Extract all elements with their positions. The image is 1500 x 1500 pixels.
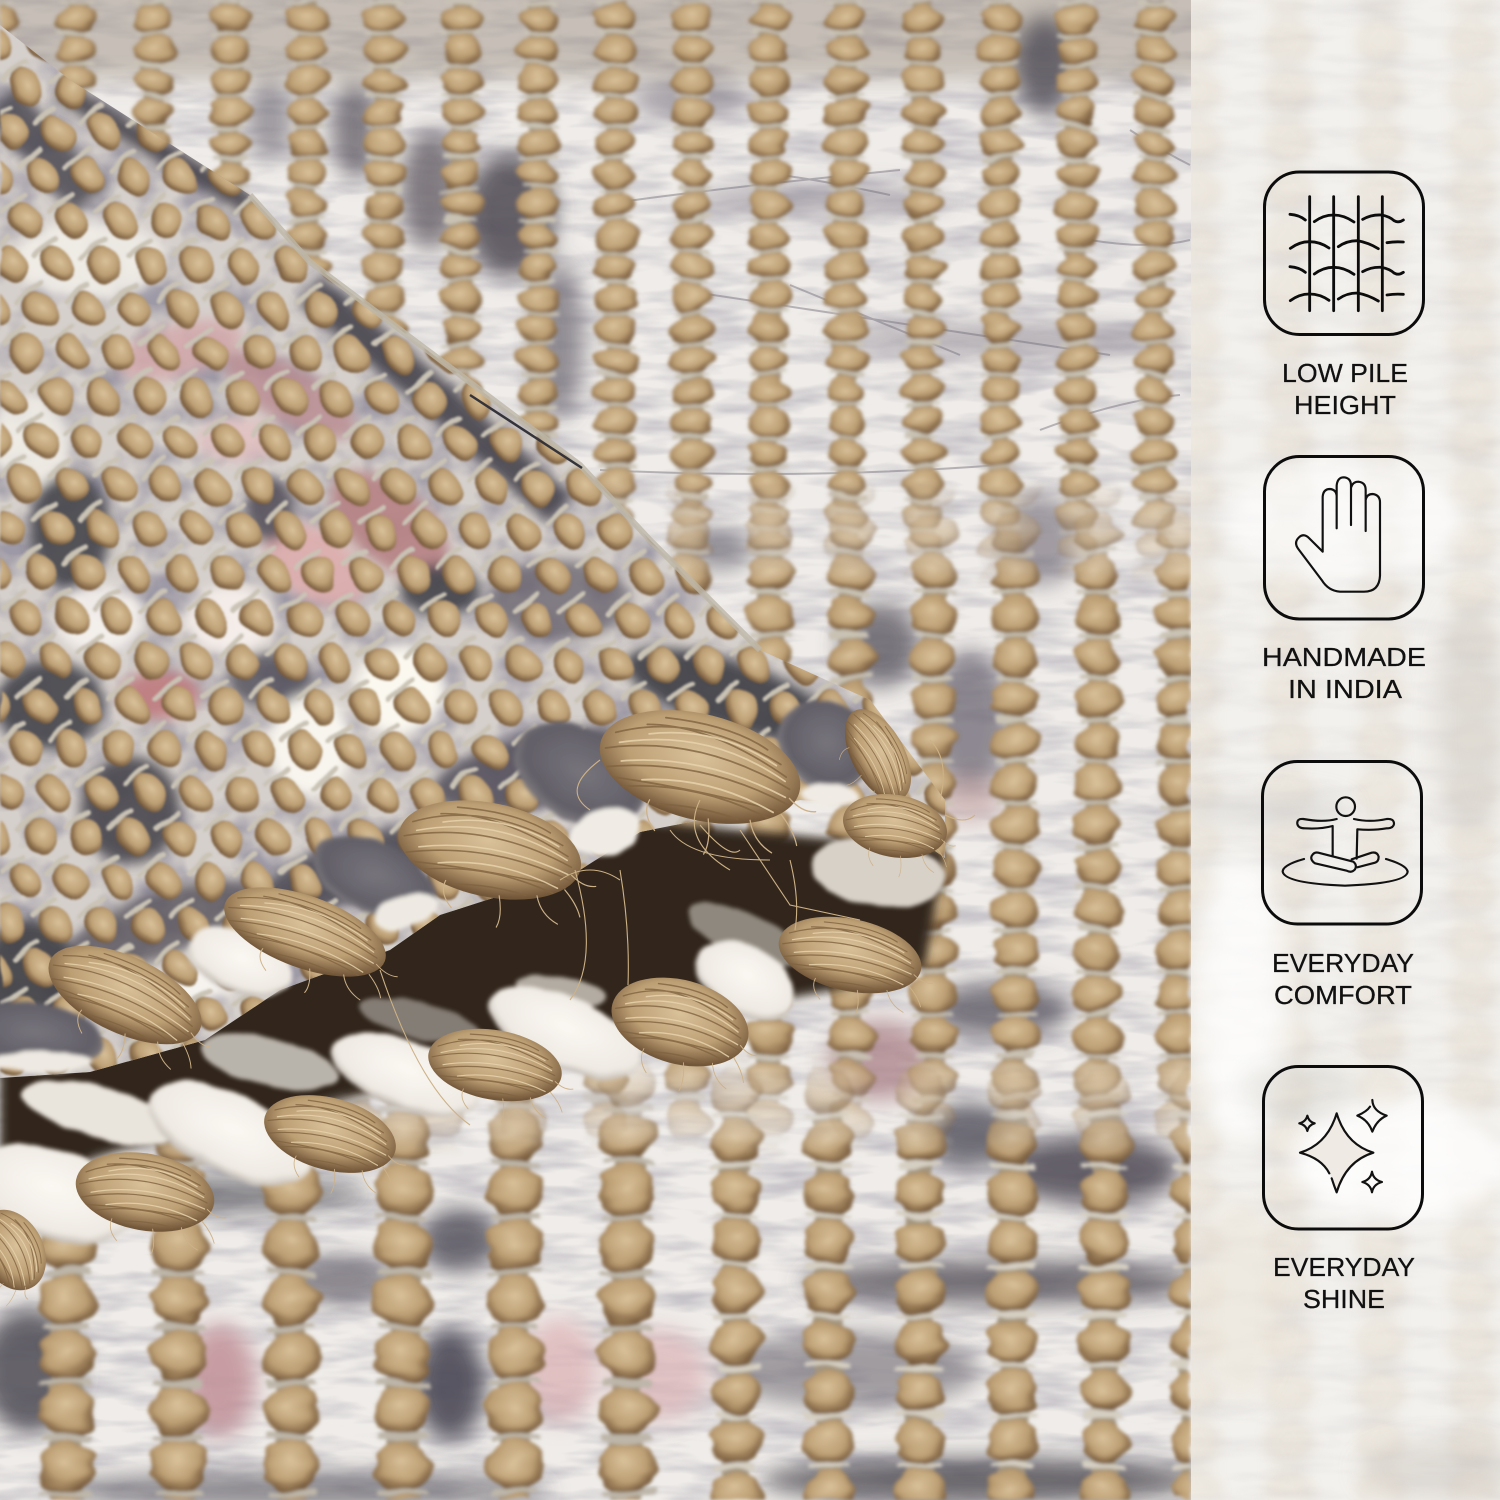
label: low pile height: HEIGHT	[1294, 390, 1396, 420]
shadow beneath the fold	[0, 820, 945, 1190]
feature: everyday comfort	[1262, 762, 1422, 1010]
label: low pile height	[1282, 358, 1408, 420]
label: everyday comfort: COMFORT	[1274, 980, 1412, 1010]
label: low pile height: LOW PILE	[1282, 358, 1408, 388]
rug fold top surface	[0, 0, 975, 1125]
lower braided edge of the rug	[0, 829, 950, 1318]
loose fibres	[380, 740, 975, 1125]
feature: everyday shine	[1264, 1066, 1422, 1314]
panel: translucent feature column	[1180, 0, 1500, 1500]
label: handmade in India: HANDMADE	[1262, 642, 1426, 672]
fold rim twine	[250, 195, 760, 650]
label: everyday shine: EVERYDAY	[1273, 1252, 1415, 1282]
label: everyday shine	[1273, 1252, 1415, 1314]
label: everyday comfort	[1272, 948, 1414, 1010]
woven stripes and colour patches on the fold	[0, 90, 845, 1040]
label: everyday shine: SHINE	[1303, 1284, 1385, 1314]
icon: sparkles	[1264, 1066, 1422, 1229]
label: handmade in India: IN INDIA	[1288, 674, 1403, 704]
jute braids along the fold edge	[25, 925, 231, 1092]
jute weave columns	[0, 0, 1191, 1500]
white and grey yarn tips	[0, 681, 890, 1076]
icon: seated figure on mat	[1262, 762, 1422, 924]
feature: handmade in India	[1262, 456, 1426, 704]
label: everyday comfort: EVERYDAY	[1272, 948, 1414, 978]
feature: low pile height	[1264, 172, 1424, 420]
icon: woven strands	[1264, 172, 1424, 334]
icon: open hand	[1264, 456, 1424, 619]
loose grey threads	[600, 130, 1190, 474]
label: handmade in India	[1262, 642, 1426, 704]
